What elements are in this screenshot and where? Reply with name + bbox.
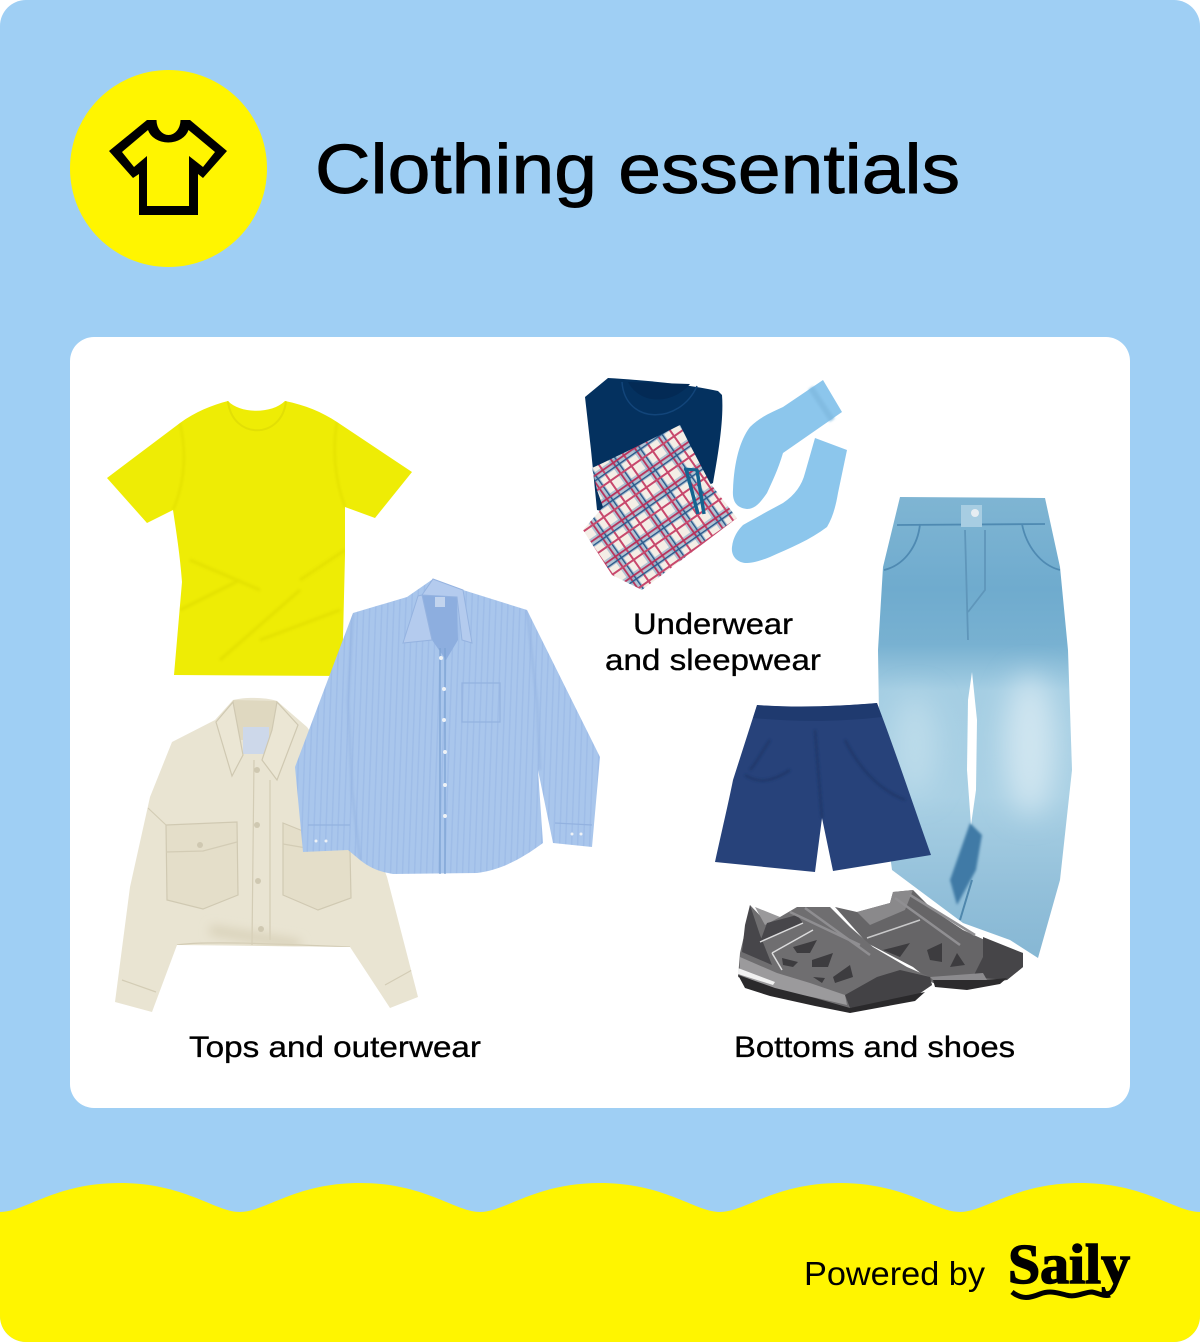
light blue jeans	[878, 497, 1072, 958]
navy sleep top	[585, 378, 722, 520]
footer: yellow wave band	[0, 1183, 1200, 1342]
yellow t-shirt	[107, 401, 412, 676]
powered by text: Powered by	[804, 1255, 986, 1292]
title: Clothing essentials	[315, 130, 960, 208]
Saily logo: Saily	[1008, 1234, 1130, 1296]
label: underwear and sleepwear: Underwear	[633, 608, 793, 641]
panel: clothing card	[70, 337, 1130, 1108]
navy shorts	[715, 703, 931, 872]
icon: t-shirt badge	[70, 70, 267, 267]
back shoe	[835, 890, 1023, 990]
front shoe	[738, 905, 932, 1013]
grey hiking shoes	[738, 890, 1023, 1013]
gap between legs	[967, 672, 977, 825]
cream jacket	[115, 698, 418, 1012]
label: tops and outerwear: Tops and outerwear	[189, 1031, 481, 1064]
label: underwear and sleepwear	[605, 608, 821, 677]
label: bottoms and shoes: Bottoms and shoes	[734, 1031, 1015, 1064]
plaid pyjama shorts	[583, 425, 737, 590]
light blue socks	[732, 380, 847, 563]
label: underwear and sleepwear: and sleepwear	[605, 644, 821, 677]
blue striped shirt	[295, 579, 600, 874]
